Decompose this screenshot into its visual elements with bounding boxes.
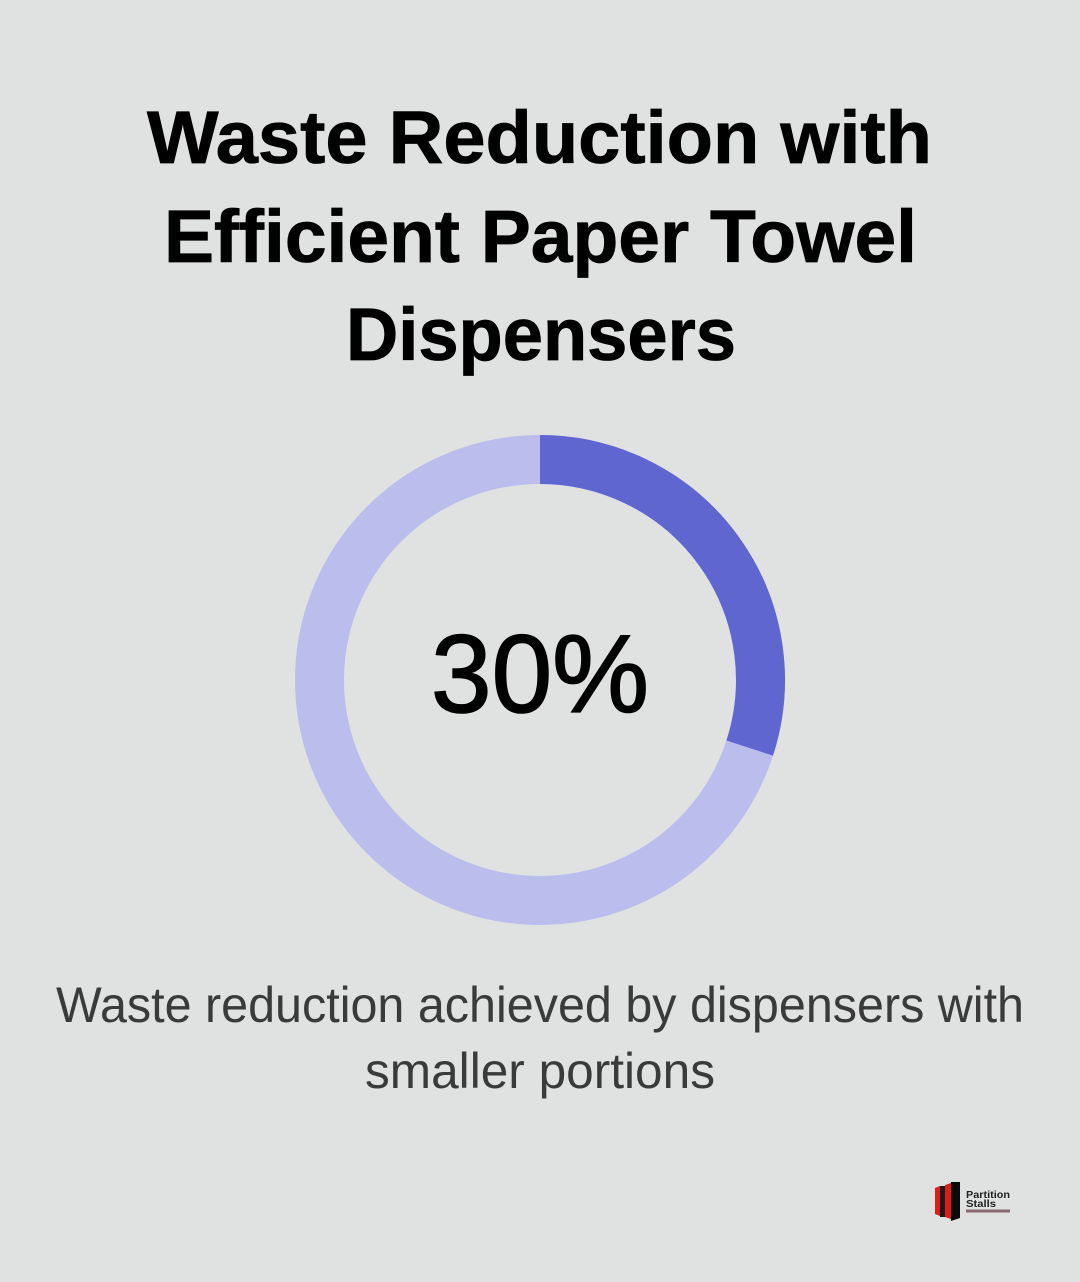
logo wordmark: Partition <box>966 1190 1010 1201</box>
logo wordmark: Stalls <box>966 1199 996 1210</box>
title: Dispensers <box>346 293 736 376</box>
donut track <box>320 460 760 900</box>
value: 30%: 30% <box>431 613 649 736</box>
logo: Partition Stalls <box>935 1182 1010 1221</box>
title: Waste Reduction with <box>147 96 932 179</box>
logo wordmark <box>966 1190 1010 1210</box>
donut chart: 30% <box>320 460 760 900</box>
logo icon <box>935 1182 960 1221</box>
title: Efficient Paper Towel <box>164 195 917 278</box>
logo tagline <box>966 1210 1010 1212</box>
title <box>147 96 932 376</box>
donut value arc <box>540 460 760 748</box>
caption: Waste reduction achieved by dispensers with <box>56 977 1024 1033</box>
caption <box>56 977 1024 1099</box>
caption: smaller portions <box>365 1043 715 1099</box>
